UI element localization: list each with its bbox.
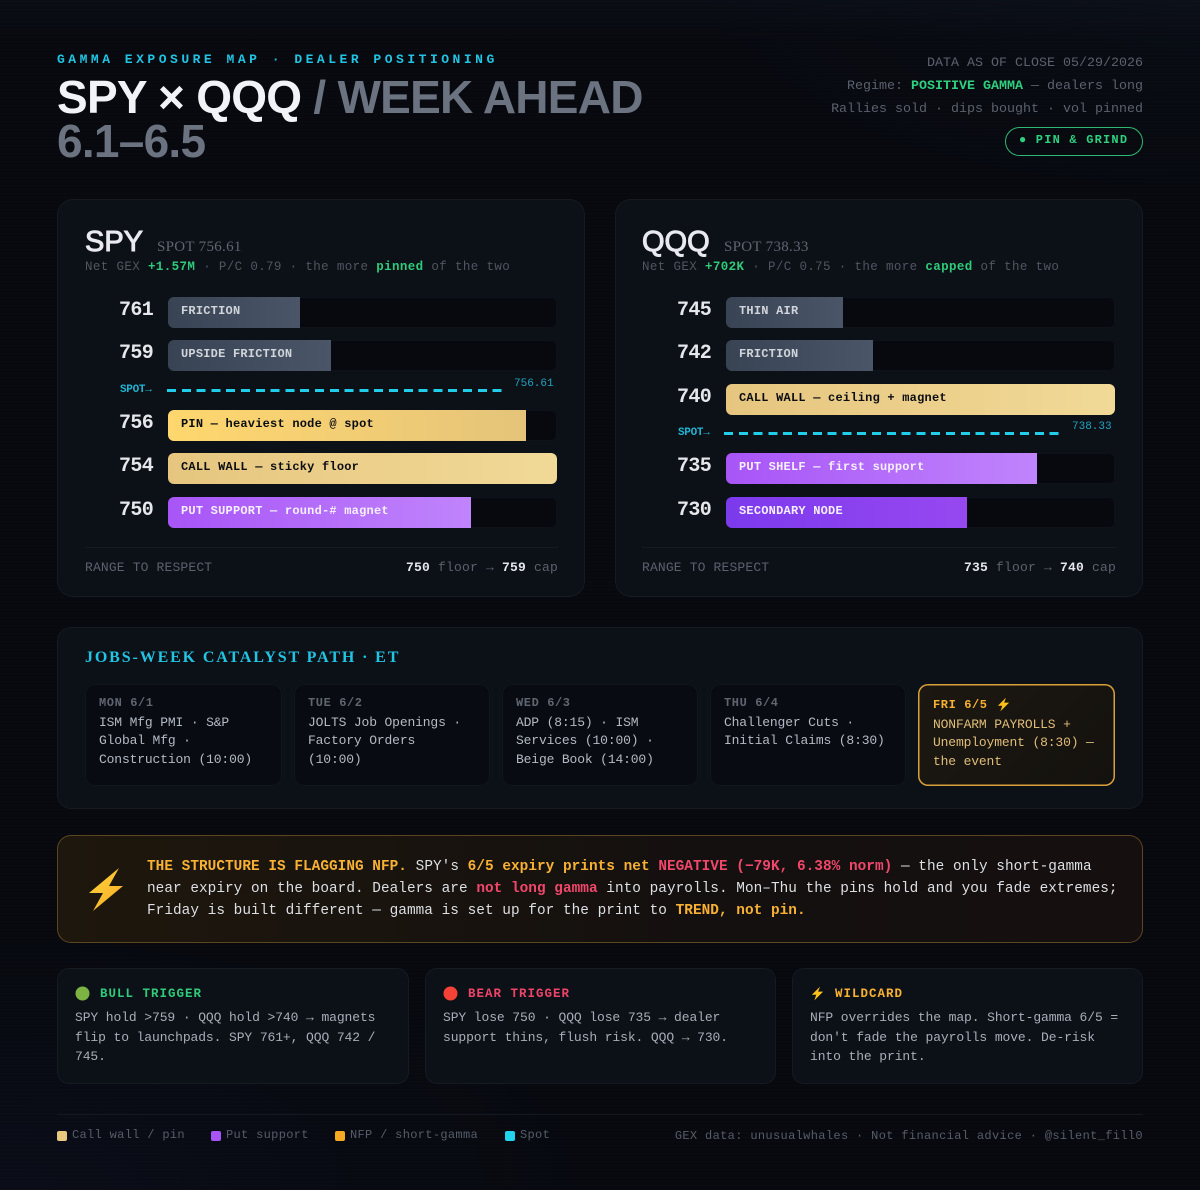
legend: NFP: NFP / short-gamma [350,1128,478,1142]
panel: SPY [57,199,585,597]
Friday label: FRI 6/5 [933,698,988,712]
bull heading: BULL TRIGGER [100,987,202,1001]
wildcard text: don't fade the payrolls move. De-risk [810,1030,1095,1044]
spot marker: SPOT→ [678,427,710,439]
day: Wednesday: ADP (8:15) · ISM [516,715,638,730]
day: Monday: MON 6/1 [99,696,154,710]
icon: small bolt [998,698,1009,712]
level 745: 745 [677,299,711,322]
callout text: Friday is built different — gamma is set up for the print to TREND, not pin. [147,903,806,919]
header meta text [831,56,1143,117]
level 742: FRICTION [739,347,798,361]
day: Thursday: THU 6/4 [724,696,779,710]
SPY range label: RANGE TO RESPECT [85,560,212,575]
level 742: 742 [677,342,711,365]
callout text: THE STRUCTURE IS FLAGGING NFP. SPY's 6/5 expiry prints net NEGATIVE (−79K, 6.38% norm) — the only short-gamma [147,859,1092,875]
level 756: PIN — heaviest node @ spot [181,417,374,431]
Friday text: NONFARM PAYROLLS + [933,717,1071,732]
level 761: 761 [119,299,153,322]
level 754: 754 [119,455,153,478]
level 754: CALL WALL — sticky floor [181,460,359,474]
bull text: flip to launchpads. SPY 761+, QQQ 742 / [75,1030,375,1044]
level 745 [677,297,843,328]
legend: call wall: Call wall / pin [72,1128,185,1142]
level 740: CALL WALL — ceiling + magnet [739,391,947,405]
wildcard text: NFP overrides the map. Short-gamma 6/5 = [810,1010,1118,1025]
SPY net GEX summary: Net GEX +1.57M · P/C 0.79 · the more pinned of the two [85,260,510,274]
footer credit: GEX data: unusualwhales · Not financial advice · @silent_fill0 [675,1129,1143,1143]
level 759: UPSIDE FRICTION [181,347,292,361]
bull text: 745. [75,1049,106,1064]
day: Monday [85,684,282,786]
header meta text: Rallies sold · dips bought · vol pinned [831,102,1143,117]
panel: wildcard [792,968,1143,1084]
legend: spot: Spot [520,1128,550,1142]
day: Tuesday [294,684,490,786]
level 759: 759 [119,342,153,365]
icon: green circle [76,986,90,1000]
icon: lightning bolt [89,868,123,911]
level 745: THIN AIR [739,304,798,318]
day: Friday highlight [918,684,1115,786]
header meta text: DATA AS OF CLOSE 05/29/2026 [927,56,1143,71]
wildcard text [810,1010,1118,1064]
QQQ heading: QQQ [642,226,710,258]
level 750: 750 [119,499,153,522]
title: SPY × QQQ / WEEK AHEAD [57,71,643,123]
level 735 [677,453,1037,484]
SPY heading: SPY [85,226,143,258]
eyebrow label: GAMMA EXPOSURE MAP · DEALER POSITIONING [57,52,498,67]
level 754 [119,453,557,484]
catalyst heading: JOBS-WEEK CATALYST PATH · ET [85,649,400,666]
level 740: 740 [677,386,711,409]
level 756 [119,410,526,441]
level 759 [119,340,331,371]
spot marker [678,421,1112,439]
wildcard heading: WILDCARD [835,987,903,1001]
Friday text: Unemployment (8:30) — [933,735,1094,750]
level 750 [119,497,471,528]
Friday text [933,717,1094,769]
day: Tuesday: JOLTS Job Openings · [308,715,461,730]
title [57,71,643,167]
bull text [75,1010,375,1064]
bear heading: BEAR TRIGGER [468,987,570,1001]
day: Thursday [710,684,906,786]
callout text: near expiry on the board. Dealers are not long gamma into payrolls. Mon–Thu the pins hold and you fade extremes; [147,881,1118,897]
QQQ net GEX summary: Net GEX +702K · P/C 0.75 · the more capped of the two [642,260,1059,274]
day: Tuesday: Factory Orders [308,733,415,748]
legend: put support: Put support [226,1128,309,1142]
level 730: 730 [677,499,711,522]
bear text: SPY lose 750 · QQQ lose 735 → dealer [443,1010,720,1025]
level 742 [677,340,873,371]
day: Wednesday: WED 6/3 [516,696,571,710]
QQQ range values: 735 floor → 740 cap [964,560,1116,575]
day: Monday: Global Mfg · [99,733,191,748]
level 761 [119,297,300,328]
level 730 [677,497,967,528]
panel: catalyst path [57,627,1143,809]
panel: QQQ [615,199,1143,597]
day: Thursday: Challenger Cuts · [724,715,854,730]
Friday text: the event [933,754,1002,769]
day: Monday: Construction (10:00) [99,752,252,767]
header meta text: Regime: POSITIVE GAMMA — dealers long [847,79,1143,94]
day: Tuesday: (10:00) [308,752,362,767]
day: Wednesday [502,684,698,786]
QQQ range label: RANGE TO RESPECT [642,560,769,575]
spot marker: 738.33 [1072,421,1112,433]
badge: pin and grind: ● PIN & GRIND [1019,133,1128,147]
callout: NFP flag [57,835,1143,943]
icon: red circle [444,986,458,1000]
spot marker: SPOT→ [120,384,152,396]
spot marker: 756.61 [514,378,554,390]
level 761: FRICTION [181,304,240,318]
legend: spot [505,1128,550,1142]
level 750: PUT SUPPORT — round-# magnet [181,504,389,518]
day: Wednesday: Services (10:00) · [516,733,654,748]
bear text: support thins, flush risk. QQQ → 730. [443,1030,728,1044]
bull text: SPY hold >759 · QQQ hold >740 → magnets [75,1010,375,1025]
day: Monday: ISM Mfg PMI · S&P [99,715,229,730]
title: 6.1–6.5 [57,115,205,167]
SPY spot price: SPOT 756.61 [157,239,242,255]
panel: bull trigger [57,968,409,1084]
day: Tuesday: TUE 6/2 [308,696,363,710]
bear text [443,1010,728,1044]
day: Thursday: Initial Claims (8:30) [724,733,885,748]
panel: bear trigger [425,968,776,1084]
level 740 [677,384,1115,415]
level 735: PUT SHELF — first support [739,460,925,474]
callout text [147,859,1118,919]
day: Wednesday: Beige Book (14:00) [516,752,654,767]
badge: pin and grind [1005,127,1143,156]
spot marker [120,378,554,396]
level 730: SECONDARY NODE [739,504,843,518]
SPY range values: 750 floor → 759 cap [406,560,558,575]
level 756: 756 [119,412,153,435]
wildcard text: into the print. [810,1049,926,1064]
QQQ spot price: SPOT 738.33 [724,239,809,255]
level 735: 735 [677,455,711,478]
icon: bolt [812,986,823,1000]
